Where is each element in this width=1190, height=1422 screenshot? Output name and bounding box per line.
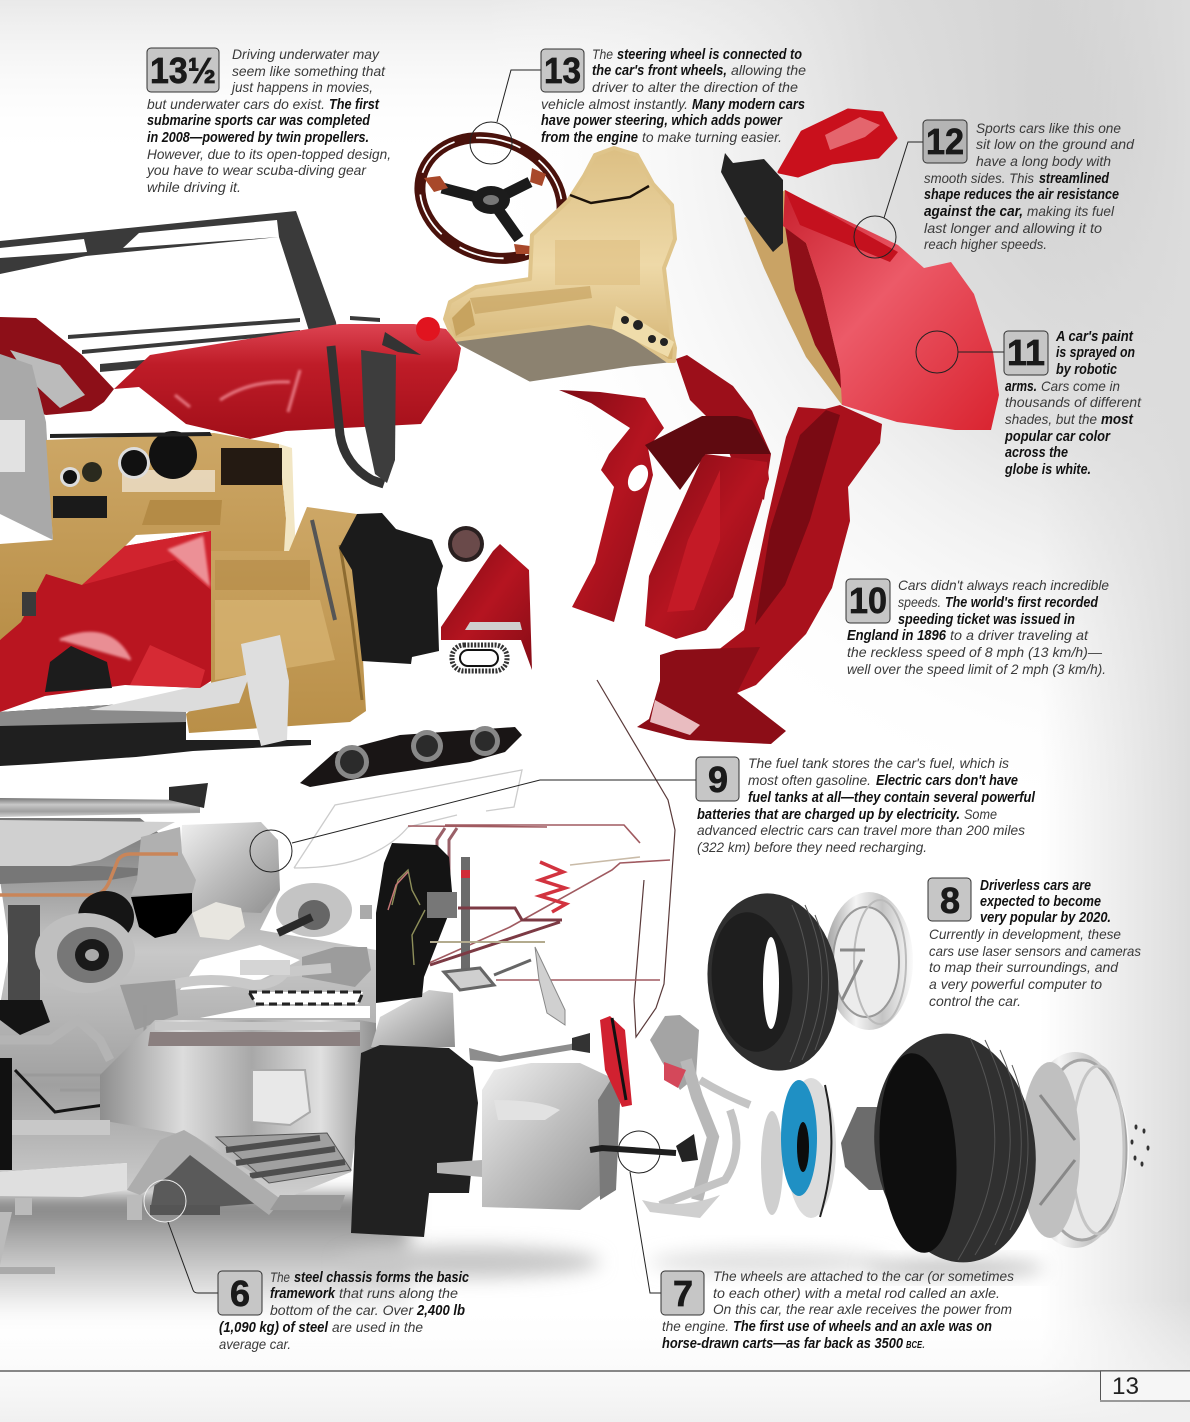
text block: 12 streamlined: against the car,: [924, 204, 1023, 220]
text block: 11 paint: most: [1101, 412, 1134, 428]
text block: 8 driverless: [928, 878, 1141, 1009]
text block: thirteen and a half: while driving it.: [147, 179, 241, 195]
text block: 6 chassis: average car.: [219, 1336, 291, 1352]
upper wheel arch: [371, 843, 457, 1047]
text block: 13 steering: have power steering, which adds power: [541, 113, 783, 129]
badge 13: 13: [544, 50, 581, 91]
badge 11: 11: [1007, 332, 1045, 373]
white gaps in engine bay: [0, 880, 370, 1018]
text block: thirteen and a half: just happens in movies,: [230, 79, 373, 95]
text block: thirteen and a half: However, due to its open-topped design,: [147, 146, 391, 162]
text block: 6 chassis: steel chassis forms the basic: [294, 1270, 469, 1286]
text block: 11 paint: shades, but the: [1005, 411, 1097, 427]
text block: 6 chassis: [218, 1269, 469, 1352]
text block: 9 fuel tank: batteries that are charged up by electricity.: [697, 807, 960, 823]
text block: thirteen and a half: in 2008—powered by twin propellers.: [147, 130, 369, 146]
door seal: [331, 332, 421, 484]
fenders: dark red body parts: [559, 355, 882, 744]
text block: 7 wheels: horse-drawn carts—as far back as 3500: [662, 1336, 903, 1352]
text block: 12 streamlined: have a long body with: [976, 153, 1111, 169]
leader: step 9: [250, 780, 696, 872]
text block: thirteen and a half: you have to wear scuba-diving gear: [146, 162, 367, 178]
text block: 10 speeding: England in 1896: [847, 628, 947, 644]
text block: 7 wheels: On this car, the rear axle receives the power from: [713, 1301, 1012, 1317]
leader: step 6: [144, 1180, 218, 1293]
reservoir: [192, 902, 245, 940]
rear deck panel: [114, 317, 461, 439]
top rail: [0, 783, 208, 884]
icon: car seat: [445, 148, 675, 380]
text block: 13 steering: driver to alter the direction of the: [592, 79, 798, 95]
text block: 12 streamlined: sit low on the ground and: [976, 136, 1135, 152]
shock, spring and linkage: [430, 857, 566, 1025]
text block: 7 wheels: .: [922, 1335, 926, 1351]
footer rule and page number: 13: [1112, 1373, 1139, 1400]
text block: 12 streamlined: streamlined: [1039, 171, 1110, 187]
text block: 7 wheels: The first use of wheels and an axle was on: [733, 1319, 992, 1335]
floor reflection: [0, 1195, 1045, 1330]
chassis beams: [0, 1058, 345, 1265]
badge 6: [218, 1271, 262, 1315]
suspension arm: [642, 1015, 750, 1218]
text block: 11 paint: A car's paint: [1055, 329, 1134, 345]
text block: 9 fuel tank: most often gasoline.: [748, 772, 871, 788]
text block: 6 chassis: The: [270, 1269, 290, 1285]
badge 7: [661, 1271, 704, 1315]
badge 10: 10: [849, 580, 887, 621]
text block: 10 speeding: the reckless speed of 8 mph (13 km/h)—: [847, 644, 1103, 660]
badge 9: 9: [708, 759, 728, 800]
text block: 10 speeding: speeding ticket was issued in: [898, 612, 1075, 628]
text block: 10 speeding: Cars didn't always reach incredible: [898, 577, 1109, 593]
text block: 9 fuel tank: advanced electric cars can travel more than 200 miles: [697, 822, 1025, 838]
text block: 11 paint: globe is white.: [1004, 462, 1091, 478]
hub cone: [841, 1107, 893, 1190]
big rim: [1020, 1052, 1129, 1248]
rear rim small wheel: [825, 892, 913, 1030]
text block: 10 speeding: The world's first recorded: [945, 595, 1099, 611]
text block: 8 driverless: Driverless cars are: [980, 878, 1091, 894]
text block: 11 paint: arms.: [1005, 379, 1037, 395]
text block: thirteen and a half: seem like something that: [232, 63, 386, 79]
badge 9: [696, 757, 739, 801]
leader: step 12: [854, 142, 923, 258]
text block: 10 speeding: well over the speed limit of 2 mph (3 km/h).: [847, 661, 1106, 677]
rear tank: [437, 1063, 620, 1210]
left engine hoses: [0, 980, 212, 1112]
text block: 10 speeding: to a driver traveling at: [950, 627, 1089, 643]
text block: 13 steering: [541, 46, 806, 146]
text block: 8 driverless: a very powerful computer to: [929, 976, 1102, 992]
tire small: [696, 885, 850, 1079]
badge 8: 8: [940, 880, 960, 921]
text block: thirteen and a half: The first: [329, 97, 380, 113]
text block: 13 steering: steering wheel is connected to: [617, 47, 802, 63]
text block: 11 paint: thousands of different: [1005, 394, 1142, 410]
text block: thirteen and a half: but underwater cars do exist.: [147, 96, 325, 112]
text block: 12 streamlined: making its fuel: [1027, 203, 1115, 219]
text block: 9 fuel tank: Electric cars don't have: [876, 773, 1018, 789]
text block: 13 steering: The: [592, 46, 613, 62]
text block: 11 paint: [1004, 329, 1142, 478]
badge 12: 12: [926, 121, 964, 162]
red brake disc: [600, 1016, 632, 1107]
text block: 8 driverless: to map their surroundings, and: [929, 959, 1119, 975]
leader: step 11: [916, 331, 1004, 373]
text block: 6 chassis: (1,090 kg) of steel: [219, 1320, 329, 1336]
underbody: [0, 635, 311, 766]
alternator: [276, 883, 372, 937]
dashboard: [0, 431, 296, 640]
engine disc: [8, 891, 135, 1020]
icon: steering wheel: [402, 117, 580, 279]
fuel and brake lines: [408, 680, 675, 1037]
text block: thirteen and a half: Driving underwater may: [232, 46, 380, 62]
text block: 6 chassis: framework: [270, 1286, 336, 1302]
text block: 13 steering: vehicle almost instantly.: [541, 96, 688, 112]
text block: 12 streamlined: Sports cars like this one: [976, 120, 1121, 136]
text block: 7 wheels: BCE: [906, 1340, 922, 1351]
badge 7: 7: [673, 1273, 693, 1314]
text block: 10 speeding: speeds.: [898, 594, 941, 610]
big black rear wheel guard: [351, 1045, 478, 1237]
text block: 13 steering: to make turning easier.: [642, 129, 782, 145]
text block: 7 wheels: the engine.: [662, 1318, 729, 1334]
text block: 9 fuel tank: Some: [964, 806, 997, 822]
muffler and exhaust: [171, 947, 371, 1004]
text block: 9 fuel tank: [696, 755, 1036, 855]
tail lights: [300, 726, 522, 787]
footer rule and page number: [0, 1370, 1190, 1402]
text block: 6 chassis: bottom of the car. Over: [270, 1302, 414, 1318]
text block: 12 streamlined: shape reduces the air resistance: [924, 187, 1119, 203]
small parts: gauge, triangle, vent: [441, 526, 532, 671]
text block: 9 fuel tank: (322 km) before they need recharging.: [697, 839, 927, 855]
text block: 7 wheels: to each other) with a metal rod called an axle.: [713, 1285, 1000, 1301]
text block: 13 steering: Many modern cars: [692, 97, 805, 113]
seat section: [186, 507, 366, 733]
text block: 12 streamlined: smooth sides. This: [924, 170, 1034, 186]
text block: 9 fuel tank: The fuel tank stores the car's fuel, which is: [748, 755, 1009, 771]
badge 6: 6: [230, 1273, 250, 1314]
text block: 6 chassis: 2,400 lb: [416, 1303, 465, 1319]
text block: 11 paint: across the: [1005, 445, 1068, 461]
hood piece and windshield: [0, 317, 114, 540]
badge 13 and a half: 13½: [150, 50, 216, 91]
text block: 13 steering: from the engine: [541, 130, 638, 146]
copper pipe: [0, 854, 178, 895]
text block: thirteen and a half: submarine sports car was completed: [147, 113, 371, 129]
text block: 10 speeding: [846, 577, 1109, 677]
text block: 11 paint: popular car color: [1004, 429, 1111, 445]
text block: 12 streamlined: [923, 120, 1135, 252]
text block: 8 driverless: very popular by 2020.: [980, 910, 1111, 926]
fuel tank: [131, 822, 280, 938]
black fender liner: [339, 513, 443, 664]
engine bay silver backdrop: [0, 818, 376, 1200]
text block: 13 steering: the car's front wheels,: [592, 63, 727, 79]
text block: 7 wheels: [661, 1268, 1014, 1352]
text block: 7 wheels: The wheels are attached to the car (or sometimes: [713, 1268, 1014, 1284]
icon: door with mirror: [721, 110, 999, 430]
thin glass frame: [294, 770, 522, 868]
roof frame: [0, 211, 380, 395]
text block: 12 streamlined: last longer and allowing it to: [924, 220, 1102, 236]
text block: 12 streamlined: reach higher speeds.: [924, 236, 1047, 252]
text block: 6 chassis: that runs along the: [339, 1285, 458, 1301]
text block: 13 steering: allowing the: [731, 62, 806, 78]
drive shaft with boot: [469, 1033, 590, 1062]
floor grating: [216, 1133, 351, 1183]
back plate and brake rotor with blue hub: [761, 1078, 836, 1218]
text block: 11 paint: is sprayed on: [1056, 345, 1135, 361]
text block: 8 driverless: cars use laser sensors and cameras: [929, 943, 1141, 959]
text block: 11 paint: Cars come in: [1041, 378, 1120, 394]
text block: 6 chassis: are used in the: [332, 1319, 423, 1335]
text block: 8 driverless: expected to become: [980, 894, 1101, 910]
red front panel: [0, 531, 211, 712]
text block: thirteen and a half: [146, 46, 391, 195]
leader: step 13: [470, 70, 541, 164]
floor pan: [100, 1020, 376, 1183]
rim bolts: [1130, 1124, 1150, 1167]
leader: step 7: [618, 1131, 661, 1293]
big tire: [860, 1023, 1050, 1273]
text block: 8 driverless: Currently in development, these: [929, 926, 1121, 942]
text block: 11 paint: by robotic: [1056, 362, 1117, 378]
text block: 8 driverless: control the car.: [929, 993, 1021, 1009]
badge 8: [928, 878, 971, 921]
axle: [590, 1148, 676, 1153]
text block: 9 fuel tank: fuel tanks at all—they contain several powerful: [748, 790, 1036, 806]
